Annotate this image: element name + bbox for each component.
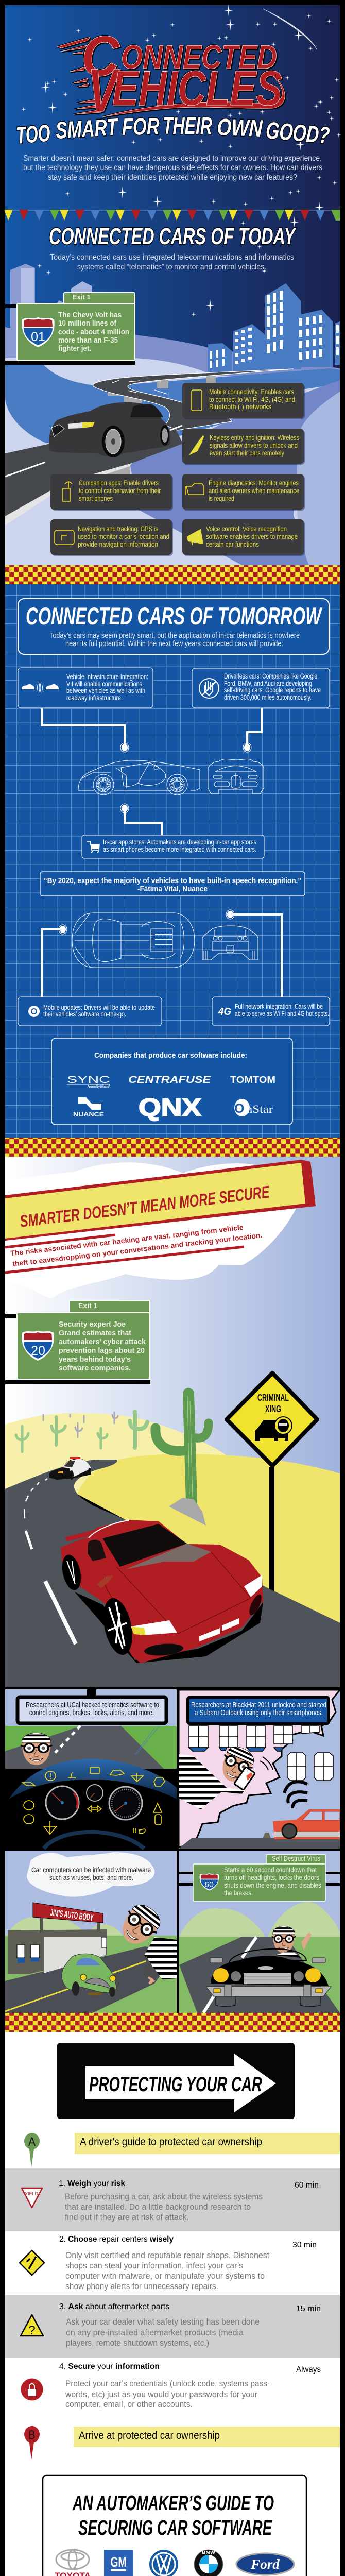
sign text [58,311,129,353]
thief in windshield [271,1926,312,1958]
sign text: code - about 4 million [58,328,129,336]
step 3 [21,2302,321,2348]
criminal crossing sign [227,1373,317,1591]
logo: Connected Vehicles: C [81,25,120,88]
shield: 01: 01 [31,330,45,344]
checker divider [5,2013,340,2032]
logo: Connected Vehicles [57,25,285,125]
sign text: fighter jet. [58,344,91,353]
card: navigation [50,519,173,556]
criminal crossing sign: XING [265,1404,281,1414]
highway sign: Joe Grand [5,1300,150,1384]
road [5,1946,177,2013]
virus sign [179,1854,340,1901]
panel: driverless cars: driven 300,000 miles autonomously. [224,693,312,701]
auto body shop [8,1903,107,1974]
icon: yield [22,2188,42,2208]
panel: vehicle infrastructure integration: roadway infrastructure. [66,694,123,702]
finish bar [74,2427,340,2447]
logo: Connected Vehicles: EHICLES [112,61,282,116]
icon: gps [55,530,74,545]
icon: question triangle [21,2315,43,2337]
skyline right [208,283,340,372]
section: smarter doesn't mean more secure [5,1157,340,2013]
shield: 20 [22,1331,54,1361]
step 3: 15 min [296,2304,321,2313]
section: connected cars of tomorrow [5,584,340,1138]
risks statement: theft to eavesdropping on your conversations and tracking your location. [12,1231,263,1268]
wifi signal [284,1782,307,1808]
highway sign: Chevy Volt: Exit 1 [73,293,91,301]
blueprint: side view car [78,760,200,795]
card: engine diagnostics: and alert owners when maintenance [209,486,299,495]
icon: yield: YIELD [25,2191,39,2196]
panel: in-car app stores: In-car app stores: Automakers are developing in-car app stores [103,838,256,846]
icon: padlock [21,2378,43,2401]
sign text: prevention lags about 20 [59,1346,145,1355]
callout: UCal: Researchers at UCal hacked telematics software to [26,1701,159,1709]
virus sign: Starts a 60 second countdown that [224,1866,317,1874]
step 1: 1. Weigh your risk [59,2179,125,2188]
windows [189,1726,333,1781]
logo: Centrafuse: CENTRAFUSE [128,1075,212,1086]
shooting star [263,9,317,50]
logo: OnStar: O [234,1101,244,1116]
logo: TomTom: TOMTOM [230,1075,275,1085]
step 2: computer with malware, or manipulate your systems to [65,2272,265,2281]
shield: 01 [22,317,55,347]
card: companion apps: Companion apps: Enable drivers [79,479,159,487]
logo: VW [149,2550,178,2576]
logo: SYNC: SYNC [67,1075,110,1086]
card: mobile connectivity: to connect to Wi-Fi, 4G, (4G) and [209,395,295,403]
panel: driverless cars [192,668,330,708]
desert hills [5,1413,340,1623]
thought cloud: such as viruses, bots, and more. [49,1873,133,1882]
logo: Nuance [73,1097,104,1118]
stars [21,4,341,317]
icon: cart [87,841,99,853]
checker divider [5,565,340,584]
police car [49,1457,91,1480]
panel: automaker's guide [43,2475,306,2576]
logo: OnStar [234,1099,273,1116]
logo: OnStar: nStar [246,1103,273,1115]
step 1: find out if they are at risk of attack. [65,2213,189,2222]
card: keyless entry [182,429,305,465]
title panel: Today’s cars may seem pretty smart, but the application of in-car telematics is nowhere [49,631,300,640]
card: engine diagnostics: is required [209,494,234,502]
thief with phone [179,1742,273,1809]
shield: 20: 20 [31,1344,45,1358]
thief behind wheel [21,1733,52,1765]
blueprint: top view car [72,913,195,968]
connectors [42,708,282,997]
sign text: Security expert Joe [59,1320,126,1329]
panel: vehicle infrastructure integration [18,668,153,708]
callout: BlackHat [188,1697,329,1724]
rock [169,1498,206,1526]
thought cloud: Car computers can be infected with malware [31,1866,151,1874]
sign text: The Chevy Volt has [58,311,122,319]
thief and arm [114,1899,177,1984]
panel: mobile updates: their vehicles’ software on-the-go. [43,1010,126,1018]
card: navigation: used to monitor a car’s location and [78,532,169,540]
thought cloud [27,1852,154,1897]
step 2: 2. Choose repair centers wisely [59,2235,174,2244]
pin B: B [29,2428,35,2442]
icon: question triangle: ? [28,2324,36,2337]
subtitle: too smart for their own good [15,112,331,149]
hills [5,327,340,565]
step 3: 3. Ask about aftermarket parts [59,2302,169,2311]
jagged building [179,1690,340,1847]
one way sign heading: PROTECTING YOUR CAR [89,2073,262,2096]
telematics text [50,253,294,272]
step 4: Always [296,2365,321,2374]
card: mobile connectivity [182,383,305,419]
panel: driverless cars: Ford, BMW, and Audi are developing [224,680,312,687]
step 1: that are installed. Do a little background research to [65,2202,251,2212]
card: companion apps: smart phones [79,494,113,502]
panel: in-car app stores: as smart phones become more integrated with connected cars. [103,845,256,853]
broken green car [62,1954,116,1997]
panel: quote [40,872,305,896]
sign text [59,1320,146,1372]
intro text: stay safe and keep their identities protected while enjoying new car features? [48,173,297,182]
logo: Connected Vehicles: V [88,57,120,125]
callout: UCal: control engines, brakes, locks, alerts, and more. [29,1709,154,1717]
logo: SYNC: Powered by Microsoft [88,1085,110,1089]
start bar [75,2133,340,2154]
logo: QNX: QNX [139,1094,201,1122]
title panel [18,599,329,654]
big cactus [156,1394,209,1502]
logo: GM [104,2550,133,2576]
logo: Ford: Ford [250,2556,280,2572]
icon: phone app [63,481,72,501]
risks statement: The risks associated with car hacking are vast, ranging from vehicle [10,1223,244,1257]
gauges [46,1785,142,1820]
step 1: 60 min [295,2181,319,2190]
shield: 60: 60 [204,1880,214,1889]
step 2: Only visit certified and reputable repair shops. Dishonest [65,2251,269,2260]
gutters [5,1687,340,2013]
panel: vehicle infrastructure integration: Vehicle Infrastructure Integration: [66,673,148,681]
blueprint: front view car [208,759,264,794]
road and pylons [5,369,294,526]
panel: mobile updates: Mobile updates: Drivers will be able to update [43,1004,155,1011]
card: companion apps: to control car behavior from their [79,486,161,495]
step 4: Protect your car’s credentials (unlock code, systems pass- [65,2379,270,2388]
panel: malware at auto body [5,1851,177,2013]
intro text [23,154,322,182]
card: voice control [182,519,305,556]
icon: 4G: 4G [218,1006,231,1018]
warning icons [23,1768,165,1834]
bunting flags [4,210,340,221]
logo: Ford [236,2553,294,2575]
logo: Nuance: NUANCE [73,1111,104,1118]
step 4 [21,2362,321,2409]
subtitle: too smart for their own good: FOR [122,113,160,140]
panel: BlackHat researchers [179,1689,340,1849]
card: mobile connectivity: Bluetooth ( ) networks [209,402,271,411]
card: keyless entry: even start their cars remotely [210,449,284,457]
panel: driverless cars: self-driving cars. Google reports to have [224,686,321,694]
logo: SYNC [67,1075,110,1089]
skyline left [10,264,92,330]
cloud [5,1162,301,1299]
logo: Connected Vehicles: ONNECTED [121,38,277,76]
step 2: 30 min [292,2241,317,2249]
comic section: hacking examples [5,1687,340,2013]
card: voice control: Voice control: Voice recognition [206,524,287,533]
step rows background [5,2168,340,2358]
panel: software companies [51,1038,292,1125]
red sports car [59,1520,264,1663]
telematics text: systems called “telematics” to monitor and control vehicles. [77,263,266,272]
logo: BMW: BMW [202,2550,216,2555]
telematics text: Today’s connected cars use integrated telecommunications and informatics [50,253,294,262]
step 4: words, etc) just as you would your passwords for your [65,2390,257,2399]
step 4: computer, email, or other accounts. [65,2400,193,2409]
logo: GM: GM [110,2554,127,2570]
virus sign: the brakes. [224,1889,253,1897]
card: engine diagnostics: Engine diagnostics: Monitor engines [209,479,299,487]
one way sign heading [57,2043,295,2119]
road [5,1460,340,1687]
panel: vehicle infrastructure integration: between vehicles as well as with [66,687,145,694]
road [179,1838,340,1849]
panel: driverless cars: Driverless cars: Companies like Google, [224,672,319,680]
icon: key [191,436,203,453]
white background [5,2032,340,2576]
sign text: software companies. [59,1364,131,1372]
virus sign: shuts down the engine, and disables [224,1881,321,1889]
pin B [24,2426,40,2460]
blueprint background [5,584,340,1138]
card: engine diagnostics [182,474,305,511]
card: mobile connectivity: Mobile connectivity: Enables cars [209,387,294,396]
subtitle: too smart for their own good: OWN [217,113,263,142]
sign text: years behind today’s [59,1355,131,1364]
step 3: players, remote shutdown systems, etc.) [66,2338,209,2348]
icon: megaphone [187,530,203,545]
icon: wrench diamond [20,2250,44,2275]
card: keyless entry: Keyless entry and ignition: Wireless [210,433,299,442]
auto body shop: JIM’S AUTO BODY [50,1907,94,1923]
step 2: show phony alerts for unnecessary repairs. [65,2282,218,2291]
panel: self destruct virus [179,1851,340,2013]
virus sign: Self Destruct Virus [272,1854,320,1862]
sign text: Grand estimates that [59,1329,131,1337]
black car front [206,1949,331,2006]
icon: refresh [28,1006,40,1017]
blueprint: rear view car [202,926,258,960]
panel: quote: -Fátima Vital, Nuance [137,885,208,893]
small cacti [16,1412,147,1452]
step 2 [20,2235,317,2291]
card: voice control: software enables drivers to manage [206,532,298,540]
icon: car and masked man [255,1417,292,1441]
icon: check engine [186,483,204,495]
highway sign: Joe Grand: Exit 1 [78,1301,98,1310]
card: companion apps [50,474,173,511]
banner [5,1160,316,1241]
logo: Toyota [55,2550,91,2576]
checker divider [5,1138,340,1157]
icon: no hands [199,679,219,698]
panel: in-car app stores [82,835,264,858]
step 4: 4. Secure your information [59,2362,160,2371]
section: intro night sky and city [4,4,341,565]
step 3: Ask your car dealer what safety testing has been done [66,2317,260,2327]
sign text: 10 million lines of [58,319,117,328]
pin A: A [28,2135,36,2149]
panel: vehicle infrastructure integration: VII will enable communications [66,680,142,688]
step 3: on any pre-installed aftermarket products (media [66,2328,244,2337]
step 2: shops can steal your information, infect your car’s [65,2261,243,2270]
highway sign: Chevy Volt [5,293,135,365]
sign text: more than an F-35 [58,336,118,345]
dashboard [5,1759,177,1849]
panel: mobile updates [18,997,162,1026]
shield: 60 [200,1873,219,1891]
connector dots [59,743,251,934]
finish bar: Arrive at protected car ownership [79,2430,220,2442]
panel: UCal researchers [5,1689,177,1849]
panel: full network integration [212,997,330,1026]
panel: quote: “By 2020, expect the majority of vehicles to have built-in speech recognition.” [44,876,301,885]
callout: UCal [18,1689,166,1723]
pin A [24,2133,40,2167]
criminal crossing sign: CRIMINAL [257,1393,289,1403]
step 1: Before purchasing a car, ask about the wireless systems [65,2192,263,2201]
night sky [5,5,340,565]
card: voice control: certain car functions [206,540,259,548]
section: protecting your car [5,2032,340,2576]
icon: phone [192,390,202,411]
logo: BMW [194,2550,223,2576]
icon: two cars signal [22,682,59,693]
subtitle: too smart for their own good: TOO [15,119,51,149]
card: navigation: Navigation and tracking: GPS is [78,524,158,533]
subtitle: too smart for their own good: THEIR [163,112,212,139]
step 1 [22,2179,319,2222]
card: keyless entry: signals allow drivers to unlock and [210,441,298,449]
red car [263,1809,340,1839]
panel: full network integration: Full network integration: Cars will be [235,1003,323,1010]
panel: software companies: Companies that produce car software include: [94,1051,247,1060]
subtitle: too smart for their own good: SMART [55,113,119,144]
black sedan [49,402,170,457]
card: navigation: provide navigation information [78,540,158,548]
virus sign: turns off headlights, locks the doors, [224,1873,321,1882]
title panel: near its full potential. Within the next few years connected cars will provide: [65,639,283,648]
start bar: A driver's guide to protected car ownership [80,2136,262,2148]
daytime sky [5,1157,340,1476]
sign text: automakers’ cyber attack [59,1337,146,1346]
